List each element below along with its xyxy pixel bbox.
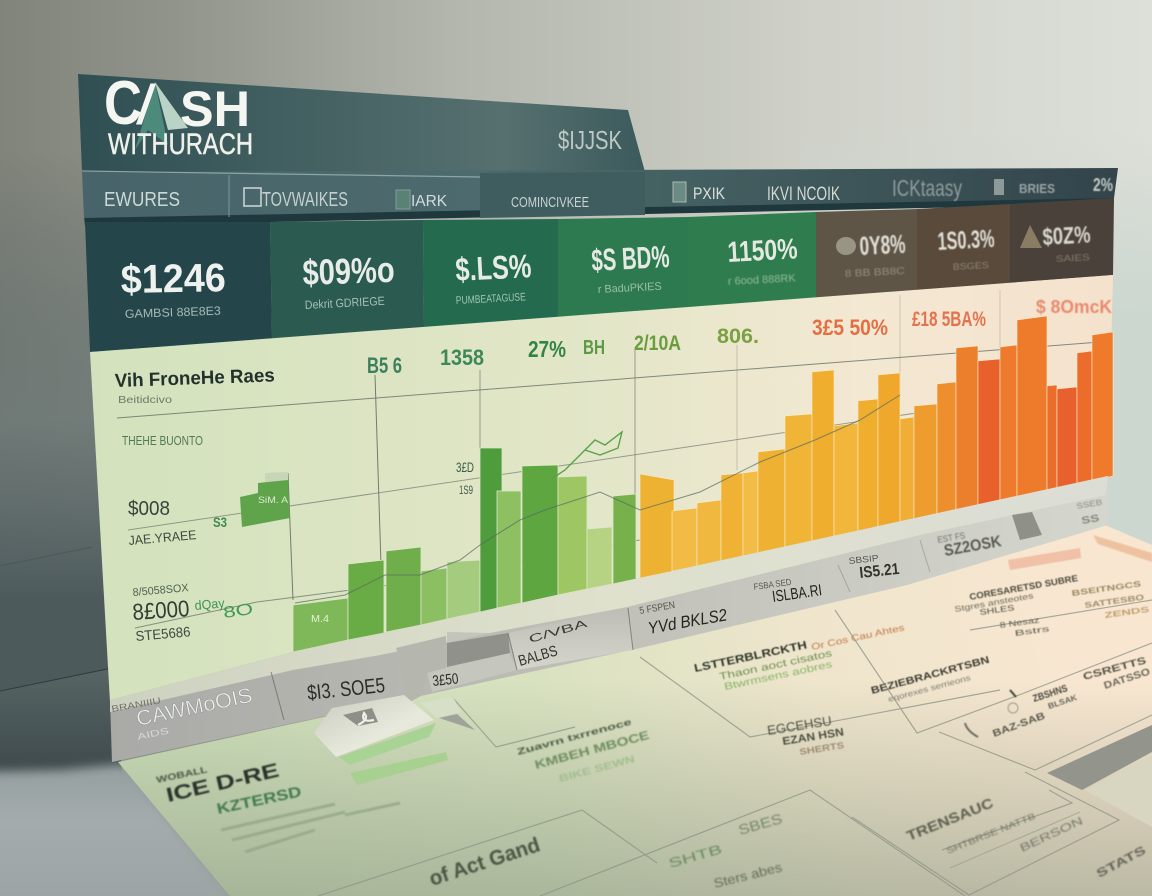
- strip icon: QR block: [1012, 512, 1042, 540]
- paper text: centre blocks: Or Cos Cau Ahtes: [810, 622, 906, 652]
- tab icon and label: TOVWAIKES: [262, 189, 348, 211]
- paper text: upper-right peach block: SHLES: [979, 603, 1015, 617]
- left statistic 2: STE5686: [135, 623, 191, 644]
- left statistic 2: 8O: [222, 601, 254, 622]
- strip cell: value block: [848, 553, 900, 582]
- paper text: upper-right peach block: Stgres ansteotes: [954, 591, 1034, 614]
- paper text: lower-left summary: [155, 717, 651, 891]
- metric card 8: $0Z%: [1042, 222, 1091, 251]
- paper text: lower-right blocks: SHTBRSE NATTB: [945, 811, 1037, 856]
- chart top value labels: B5 6: [367, 353, 402, 378]
- strip text: SS: [1081, 513, 1101, 527]
- tab label: COMINCIVKEE: [511, 194, 589, 211]
- paper text: upper-right peach block: ZENDS: [1104, 605, 1151, 620]
- metric card 8: SAIES: [1056, 252, 1090, 264]
- chart value labels on bars: 1S9: [459, 483, 473, 497]
- bar chart: [293, 316, 1113, 652]
- paper text: centre blocks: Thaon aoct cisatos: [718, 648, 833, 683]
- chart top value labels: $ 8OmcK: [1036, 297, 1112, 317]
- strip cell: value block: 5 FSPEN: [639, 600, 676, 617]
- paper text: centre blocks: EZAN HSN: [782, 726, 845, 748]
- paper text: lower-left summary: of Act Gand: [426, 833, 543, 891]
- panel: dashboard screen: [78, 69, 1118, 785]
- left statistic 2: 8/5058SOX: [132, 582, 190, 599]
- paper text: upper-right peach block: BSEITNGCS: [1071, 579, 1143, 598]
- left statistic 1: $008: [128, 498, 170, 520]
- paper text: upper-right peach block: 8 Nesaz: [999, 616, 1040, 630]
- tab label: EWURES: [104, 189, 180, 211]
- tab icon: [994, 179, 1004, 195]
- strip cell: value block: EST FS: [937, 530, 966, 545]
- title: /: [136, 73, 157, 136]
- tab label: BRIES: [1019, 181, 1055, 196]
- metric card 3: PUMBEATAGUSE: [456, 291, 526, 307]
- tab icon and label: IARK: [411, 193, 447, 210]
- title: SH: [180, 81, 250, 137]
- paper text: lower-right blocks: SBES: [736, 810, 784, 838]
- paper text: centre blocks: BAZ-SAB: [991, 711, 1047, 740]
- bottom info strip: [110, 476, 1108, 762]
- tab number: 2%: [1093, 175, 1113, 195]
- paper text: lower-right blocks: STATS: [1094, 843, 1148, 881]
- chart top value labels: [367, 297, 1112, 378]
- tab icon and label: [673, 182, 726, 203]
- strip cell: value block: SZ2OSK: [943, 533, 1003, 560]
- chart top value labels: 27%: [528, 336, 566, 362]
- strip cell: left label: BRANIIIU: [111, 695, 162, 714]
- metric card 2: $09%o: [302, 249, 395, 293]
- paper text: centre blocks: CSRETTS: [1082, 655, 1148, 683]
- navigation tabs: [82, 168, 1118, 226]
- metric card 4: r BaduPKIES: [598, 281, 662, 296]
- paper text: lower-left summary: WOBALL: [155, 764, 209, 785]
- metric card 1: GAMBSI 88E8E3: [125, 304, 221, 321]
- metric card 2: [270, 220, 424, 339]
- paper text: centre blocks: EGCEHSU: [766, 713, 833, 738]
- metric card 6: 8 BB BB8C: [845, 266, 905, 280]
- title: [104, 69, 253, 161]
- small green callout bar: SiM. A: [258, 495, 288, 505]
- paper text: upper-right peach block: SATTESBO: [1084, 593, 1145, 610]
- metric card 5: [688, 212, 816, 308]
- paper text: centre blocks: Btwrmsens aobres: [723, 659, 833, 693]
- strip cell: small amount: 3£50: [432, 670, 459, 690]
- strip cell: value block: IS5.21: [859, 561, 900, 582]
- axis label: THEHE BUONTO: [122, 434, 203, 448]
- left statistic 2: dQay: [194, 595, 226, 613]
- metric card 6: [816, 209, 917, 298]
- strip cell: value block: SBSIP: [848, 553, 879, 566]
- metric card 7: [917, 204, 1010, 290]
- header amount: $IJJSK: [558, 125, 623, 155]
- title: WITHURACH: [108, 128, 253, 161]
- chart value labels on bars: [311, 459, 474, 625]
- paper text: lower-left summary: BIKE SEWN: [558, 754, 636, 785]
- paper text: centre blocks: DATSSO: [1103, 666, 1152, 692]
- yellow and orange bars: [640, 316, 1113, 578]
- chart heading: [114, 365, 275, 406]
- strip cell: balance: BALBS: [516, 642, 560, 670]
- chart top value labels: £18 5BA%: [912, 308, 986, 331]
- paper text: centre blocks: SHERTS: [799, 740, 845, 757]
- title: C: [104, 69, 142, 138]
- tab icon and label: PXIK: [693, 184, 726, 203]
- metric card 3: $.LS%: [454, 247, 532, 288]
- trend lines: [295, 395, 900, 603]
- paper text: lower-right blocks: TRENSAUC: [904, 794, 995, 844]
- paper text: upper-right peach block: CORESARETSD SUBRE: [969, 573, 1079, 602]
- strip cell: value block: ISLBA.RI: [771, 582, 823, 606]
- paper text: centre blocks: ZBSHNS: [1032, 683, 1069, 705]
- paper text: centre blocks: LSTTERBLRCKTH: [693, 639, 808, 675]
- chart top value labels: 1358: [440, 345, 484, 370]
- chart heading: Beitidcivo: [118, 395, 173, 406]
- paper text: lower-right blocks: SHTB: [667, 841, 724, 871]
- tab icon and label: [396, 190, 447, 210]
- paper text: centre blocks: BLSAK: [1047, 693, 1078, 711]
- panel: paper report on the floor: [118, 525, 1152, 896]
- metric card 6: 0Y8%: [859, 229, 906, 261]
- small green callout bar: [240, 472, 290, 527]
- metric card 3: [423, 219, 558, 328]
- strip cell: value block: [753, 577, 823, 606]
- tab label: ICKtaasy: [892, 175, 962, 201]
- chart value labels on bars: M.4: [311, 614, 329, 625]
- strip cell: amount: $I3. SOE5: [306, 674, 386, 705]
- paper text: lower-left summary: ICE D-RE: [164, 760, 281, 807]
- left statistic 1: [128, 498, 227, 548]
- paper text: upper-right peach block: Bstrs: [1014, 624, 1050, 638]
- metric card 8: [1010, 198, 1114, 283]
- strip cell: value block: FSBA SED: [753, 577, 792, 592]
- strip text: [1076, 498, 1103, 527]
- strip text: SSEB: [1076, 498, 1103, 511]
- screen stand base: [314, 695, 475, 785]
- paper text: lower-left summary: KMBEH MBOCE: [533, 728, 651, 772]
- chart panel: [90, 275, 1113, 702]
- metric card 2: Dekrit GDRIEGE: [304, 294, 385, 312]
- left statistic 1: S3: [213, 514, 227, 530]
- metric card 4: $S BD%: [591, 239, 670, 278]
- screen stand neck: [380, 636, 446, 718]
- metric card 7: BSGES: [953, 260, 989, 272]
- chart top value labels: 2/10A: [634, 332, 681, 355]
- paper text: lower-right blocks: Sters abes: [712, 859, 784, 891]
- left statistic 2: 8£000: [132, 595, 190, 625]
- chart top value labels: 3£5 50%: [812, 315, 888, 340]
- strip cell: small label: C/VBA: [528, 617, 590, 646]
- dashboard header banner: [78, 69, 645, 172]
- chart heading: Vih FroneHe Raes: [114, 365, 275, 392]
- strip cell: value block: YVd BKLS2: [646, 605, 729, 638]
- left statistic 1: JAE.YRAEE: [128, 527, 197, 548]
- tab icon and label: [244, 188, 348, 211]
- metric card 1: [85, 222, 272, 352]
- strip cell: left label: AIDS: [136, 726, 170, 742]
- tab label: IKVI NCOIK: [767, 184, 840, 205]
- left statistic 2: [132, 582, 254, 644]
- metric card 5: 1150%: [727, 233, 798, 269]
- paper icons: small marks: [965, 690, 1018, 737]
- green bars: [293, 448, 636, 652]
- chart top value labels: BH: [583, 337, 605, 359]
- paper text: centre blocks: [693, 622, 1152, 757]
- paper text: centre blocks: BEZIEBRACKRTSBN: [870, 655, 991, 697]
- paper text: upper-right peach block: [954, 535, 1152, 638]
- paper text: lower-left summary: KZTERSD: [215, 783, 303, 818]
- strip cell: left label: CAWMoOIS: [134, 684, 254, 731]
- metric card 5: r 6ood 888RK: [728, 272, 797, 288]
- metric card 1: $1246: [120, 256, 226, 302]
- metric card 4: [558, 217, 688, 318]
- paper text: lower-right blocks: [667, 794, 1148, 891]
- metric card 7: 1S0.3%: [937, 225, 995, 256]
- paper text: lower-right blocks: BERSON: [1018, 815, 1085, 855]
- strip cell: left label: [111, 684, 254, 742]
- chart top value labels: 806.: [717, 325, 759, 348]
- paper text: centre blocks: eqorexes serrieons: [887, 673, 972, 704]
- chart value labels on bars: 3£D: [456, 459, 474, 475]
- metric cards row: [85, 198, 1114, 352]
- paper text: lower-left summary: Zuavrn txrrenoce: [516, 717, 632, 757]
